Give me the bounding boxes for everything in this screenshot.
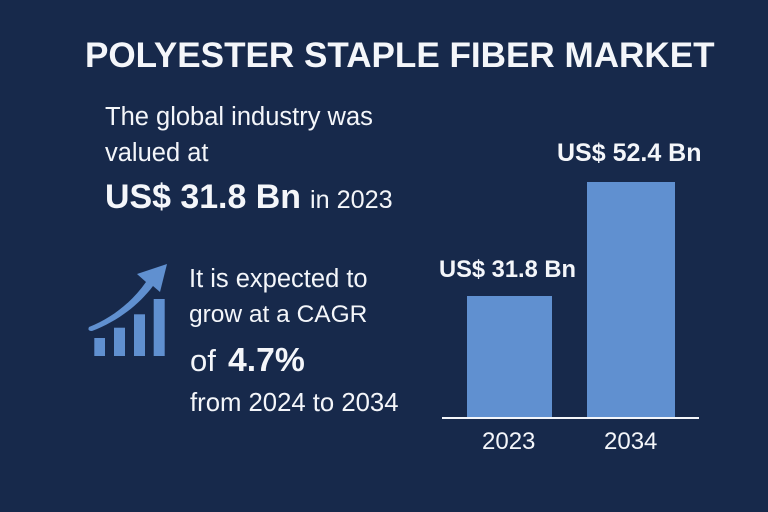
text block: CAGR: It is expected to (189, 265, 368, 293)
title: POLYESTER STAPLE FIBER MARKET (85, 36, 715, 75)
text block: industry value (105, 103, 393, 216)
bar: 2023 (467, 296, 552, 417)
value label: 2023: US$ 31.8 Bn (439, 257, 576, 283)
text block: industry value: US$ 31.8 Bn (105, 178, 301, 216)
text block: CAGR: grow at a CAGR (189, 301, 367, 328)
value label: 2034: US$ 52.4 Bn (557, 139, 702, 167)
bar chart (439, 139, 702, 455)
text block: CAGR: 4.7% (228, 341, 305, 379)
text block: CAGR (189, 265, 398, 417)
axis label: 2023: 2023 (482, 428, 535, 455)
text block: industry value: The global industry was (105, 103, 373, 131)
axis label: 2034: 2034 (604, 428, 657, 455)
text block: industry value: in 2023 (310, 186, 393, 214)
bar: 2034 (587, 182, 675, 417)
icon: growth chart with arrow (88, 264, 167, 356)
text block: CAGR: of (190, 343, 216, 378)
text block: CAGR: from 2024 to 2034 (190, 389, 398, 417)
text block: industry value: valued at (105, 139, 208, 167)
axis (442, 417, 699, 419)
